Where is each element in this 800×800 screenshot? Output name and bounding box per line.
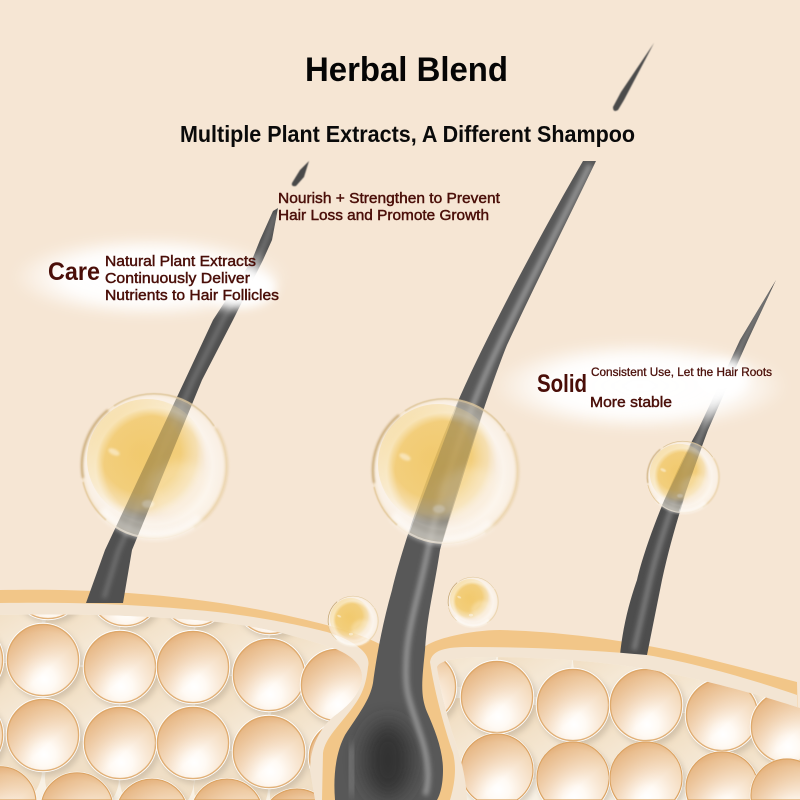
hair seen through right bubble	[662, 443, 702, 512]
hair: left tip	[292, 161, 309, 186]
right skin inner layer	[430, 647, 800, 800]
solid glow extension over hair	[696, 360, 748, 396]
callout: solid: Consistent Use, Let the Hair Roots	[591, 365, 772, 379]
bubble: small right	[448, 577, 498, 627]
callout: care	[48, 253, 279, 304]
title: Herbal Blend	[305, 51, 508, 89]
care glow extension over hair	[204, 268, 276, 308]
bubble: right medium	[647, 441, 719, 513]
text block: nourish and strengthen: Nourish + Strengthen to Prevent	[278, 190, 501, 207]
bubble: centre large	[372, 398, 518, 544]
solid callout glow	[492, 340, 788, 432]
callout: care: Nutrients to Hair Follicles	[105, 287, 279, 304]
hair: left	[86, 208, 278, 603]
hair: right	[620, 280, 776, 655]
hair seen through centre bubble	[410, 402, 484, 542]
hair: centre tip	[613, 43, 654, 111]
cells: right cluster	[437, 657, 800, 800]
hair: centre with root bulb	[334, 161, 596, 800]
subtitle: Multiple Plant Extracts, A Different Shampoo	[180, 121, 635, 147]
callout: solid: Solid	[537, 370, 587, 398]
callout: care: Natural Plant Extracts	[105, 253, 256, 270]
callout: care: Care	[48, 258, 100, 286]
hair seen through left bubble	[116, 398, 192, 535]
left skin inner layer	[0, 603, 369, 800]
callout: care: Continuously Deliver	[105, 270, 250, 287]
text block: nourish and strengthen	[278, 190, 501, 224]
text block: nourish and strengthen: Hair Loss and Promote Growth	[278, 207, 489, 224]
cells: left cluster	[0, 614, 362, 800]
care callout glow	[12, 235, 288, 319]
left skin outer band	[0, 590, 400, 800]
right skin outer band	[405, 630, 800, 800]
callout: solid	[537, 365, 772, 411]
bubble: left large	[81, 393, 227, 539]
callout: solid: More stable	[590, 394, 672, 411]
bubble: small left	[328, 596, 378, 646]
